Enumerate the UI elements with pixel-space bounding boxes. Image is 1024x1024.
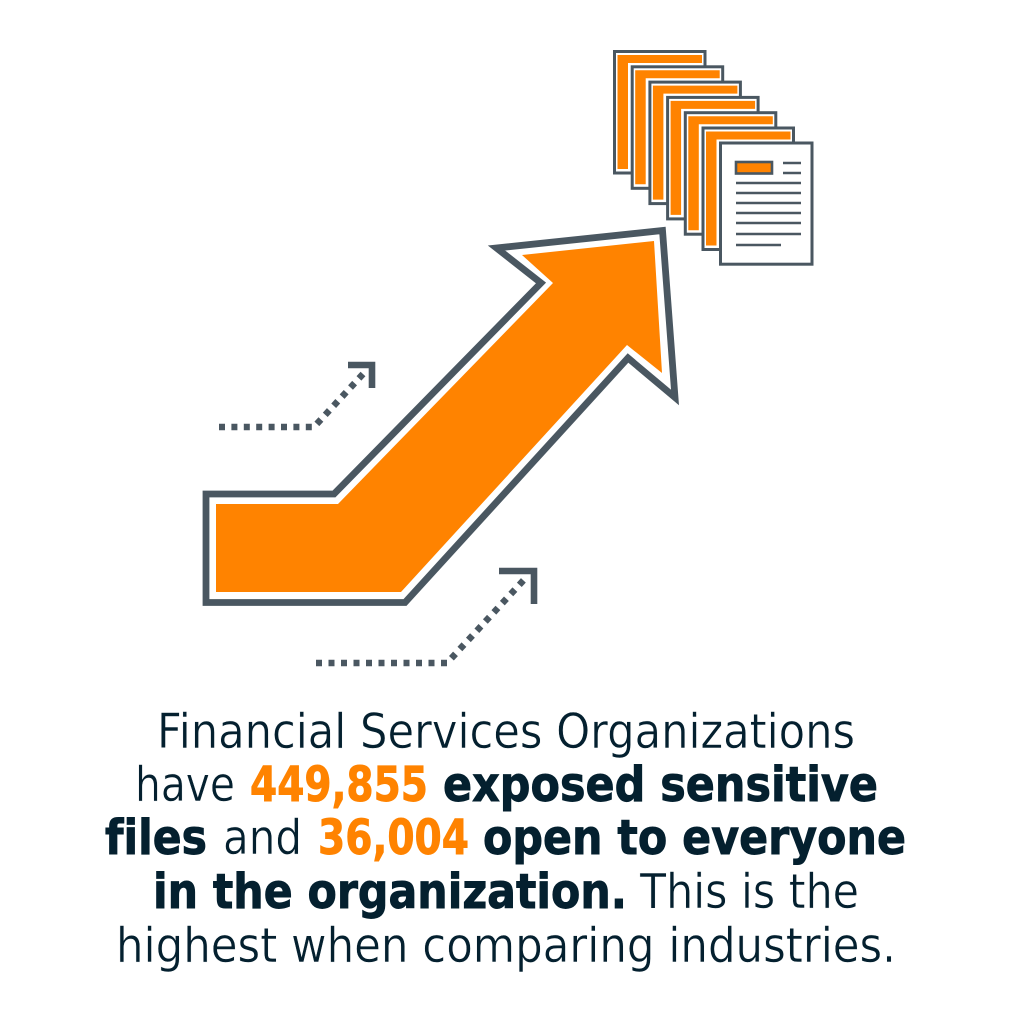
arrow fill [216,241,662,592]
document page 2 [632,67,723,188]
caption text: exposed sensitive [443,757,878,813]
caption text [105,704,906,974]
document page 1 [614,52,705,173]
caption text: have [135,757,235,813]
icon: stack of documents [614,52,812,264]
caption text: highest when comparing industries. [116,918,896,974]
document page 5 [685,113,776,234]
caption text: files [105,810,207,866]
caption text: in the organization. [153,864,627,920]
caption text: This is the [639,864,859,920]
front document page [720,143,812,264]
small dotted arrow: upper [219,365,372,427]
small dotted arrow: lower [316,571,534,663]
document page 6 [703,128,794,250]
document page 3 [650,82,740,204]
caption text: and [223,810,302,866]
caption text: open to everyone [483,810,906,866]
caption text: 449,855 [250,757,428,813]
document page 4 [668,97,758,219]
caption text: Financial Services Organizations [157,704,855,760]
large orange arrow [206,230,675,602]
arrow outline [206,230,675,602]
caption text: 36,004 [318,810,469,866]
